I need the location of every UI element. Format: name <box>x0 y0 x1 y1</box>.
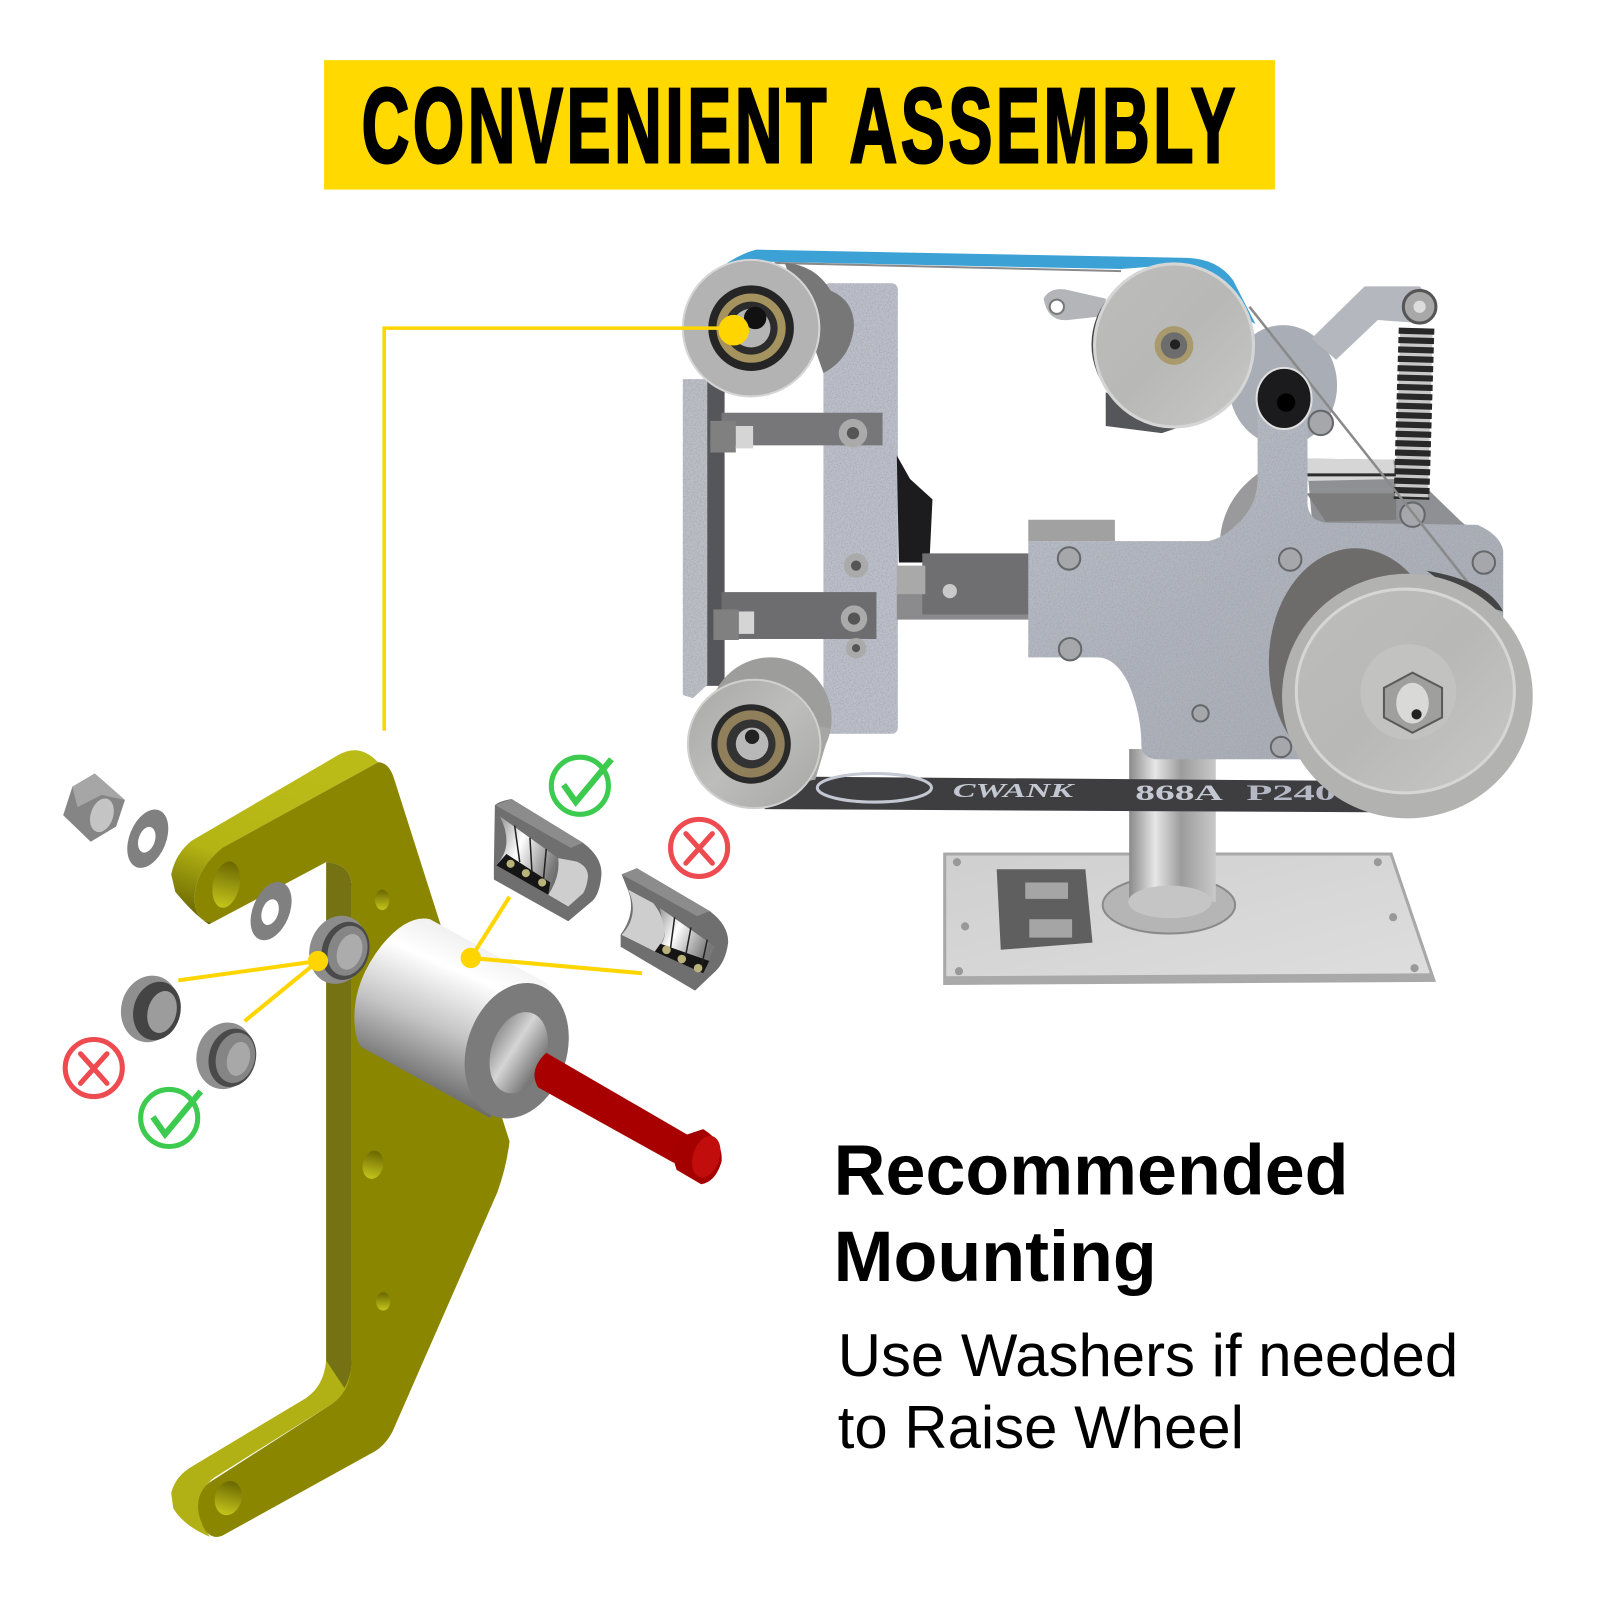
vertical side plate <box>823 283 898 734</box>
bracket holes <box>208 859 390 1518</box>
horizontal bar <box>897 553 1029 620</box>
motor housing <box>1220 459 1498 611</box>
washers <box>119 804 300 946</box>
upper left roller <box>683 260 819 396</box>
main mounting plate <box>1028 403 1503 759</box>
black socket bolt <box>1257 368 1312 429</box>
base plate <box>945 854 1434 983</box>
black knob <box>897 456 932 563</box>
raised block <box>1028 520 1115 541</box>
correct bearing half shell <box>494 799 601 921</box>
title banner: CONVENIENT ASSEMBLY <box>362 66 1235 185</box>
tensioner arm and pivot <box>1044 286 1436 445</box>
mounted bushing <box>300 908 377 992</box>
yellow mounting bracket <box>171 750 510 1537</box>
leader lines and dots <box>178 897 642 1021</box>
bracket lower side surface <box>171 1361 354 1537</box>
lower belt: 868A <box>1135 780 1224 805</box>
thin front plate <box>683 379 725 698</box>
icon: red cross lower <box>65 1039 122 1097</box>
wrong bushing <box>114 969 187 1049</box>
icon: red cross upper <box>671 819 728 876</box>
body text: Use Washers if needed <box>838 1322 1458 1389</box>
hex nut <box>63 774 125 842</box>
heading: recommended mounting: Recommended <box>834 1130 1349 1210</box>
body text: to Raise Wheel <box>838 1394 1244 1461</box>
wire <box>1249 307 1483 601</box>
column and flange <box>1103 749 1235 934</box>
icon: green check upper <box>551 757 611 814</box>
large drive wheel <box>1269 548 1533 818</box>
spacer cylinder <box>354 919 586 1132</box>
heading: recommended mounting <box>834 1130 1349 1297</box>
bracket front face <box>195 762 510 1537</box>
body text <box>838 1322 1458 1461</box>
roller back shadow cylinder <box>785 263 854 373</box>
washer and nut stack <box>63 774 300 946</box>
plate screws <box>1058 411 1495 757</box>
icon: green check lower <box>141 1089 201 1146</box>
tension spring <box>1403 290 1436 499</box>
bracket inner edge <box>326 862 352 1388</box>
top blue belt <box>713 250 1256 324</box>
lower left roller <box>688 657 832 808</box>
lower belt <box>764 774 1371 812</box>
bracket upper side surface <box>171 750 378 924</box>
lower belt: P240 <box>1246 780 1336 805</box>
belt grinder machine photo <box>683 250 1533 983</box>
lower belt: CWANK <box>953 780 1075 802</box>
callout leader line to roller <box>384 315 749 731</box>
correct bushing <box>189 1016 263 1096</box>
adjustment arms <box>710 413 883 658</box>
wrong bearing half shell <box>621 868 728 991</box>
upper right pulley <box>1091 264 1254 433</box>
heading: recommended mounting: Mounting <box>834 1217 1157 1297</box>
red bolt <box>534 1053 725 1184</box>
